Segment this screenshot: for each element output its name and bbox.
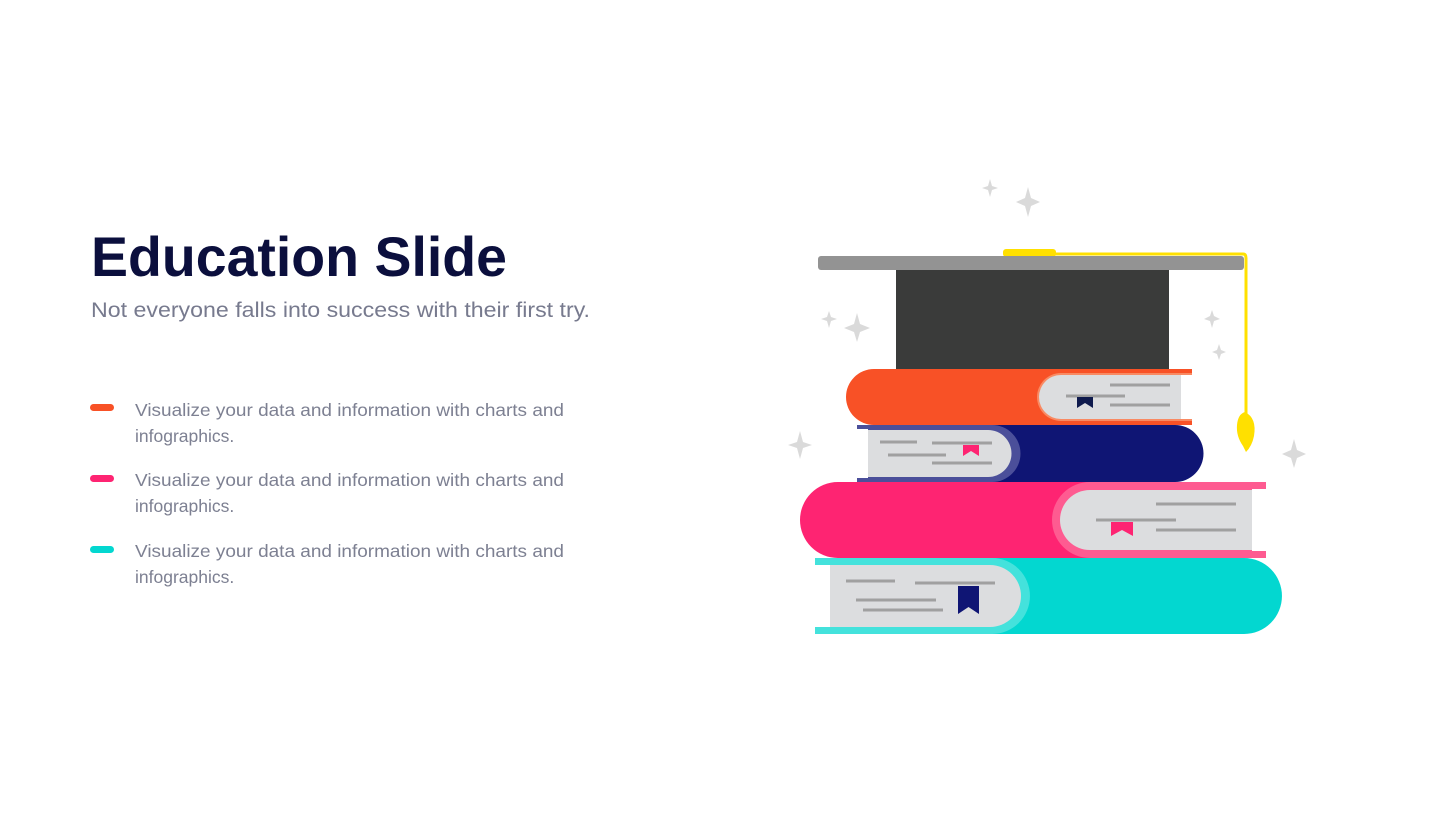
bullet 2 — [90, 470, 564, 516]
bullet 3: infographics. — [135, 567, 234, 587]
bullet 1: Visualize your data and information with charts and — [135, 400, 564, 420]
bullet 3 — [90, 541, 564, 587]
bullet 2: Visualize your data and information with charts and — [135, 470, 564, 490]
graduation cap — [818, 249, 1255, 452]
subtitle: Not everyone falls into success with their first try. — [91, 299, 590, 322]
bullet 1: infographics. — [135, 426, 234, 446]
bullet 1 — [90, 400, 564, 446]
book: teal — [815, 558, 1282, 634]
bullet 3: Visualize your data and information with charts and — [135, 541, 564, 561]
title: Education Slide — [91, 225, 507, 288]
illustration: books and graduation cap — [788, 179, 1306, 634]
book: navy — [857, 425, 1204, 482]
bullet 2: infographics. — [135, 496, 234, 516]
sparkles — [788, 179, 1306, 468]
book: pink — [800, 482, 1266, 558]
book: orange — [846, 369, 1192, 425]
bullet list — [90, 400, 564, 587]
